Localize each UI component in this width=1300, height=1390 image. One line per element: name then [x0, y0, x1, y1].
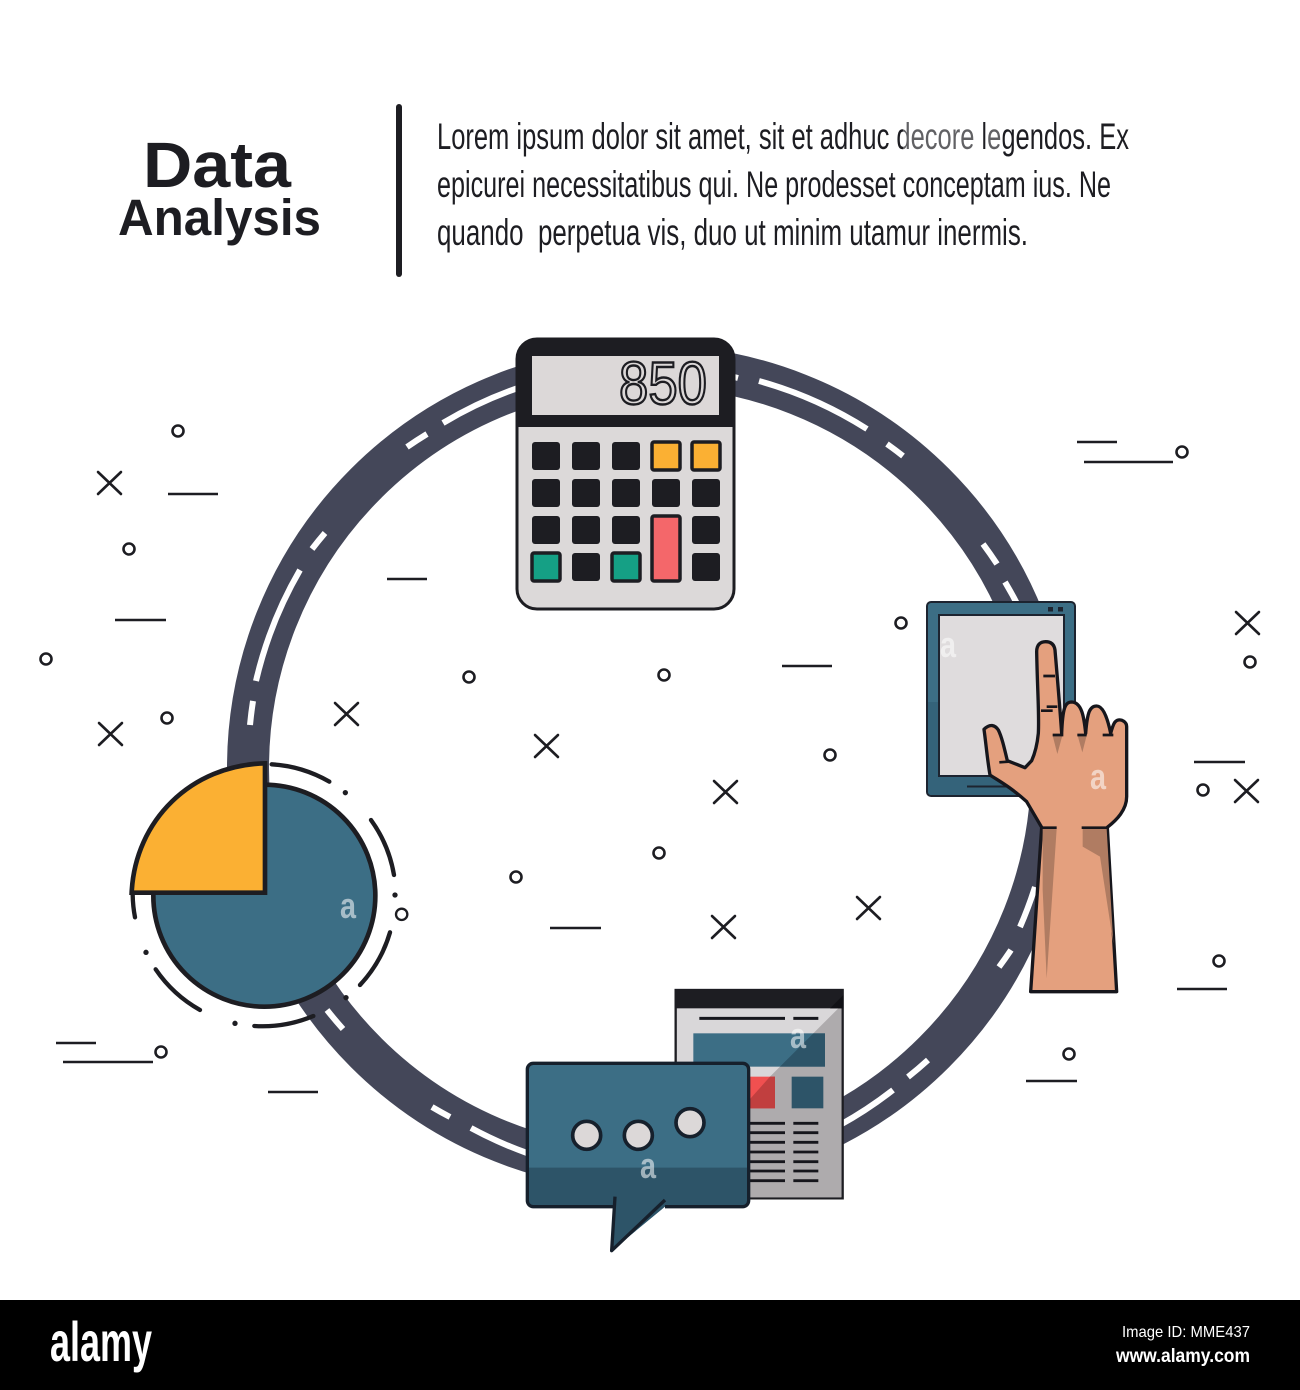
header: title: [118, 129, 321, 246]
header: title: Analysis: [118, 189, 321, 246]
decorative crosses: [98, 472, 1259, 938]
footer url: www.alamy.com: [1115, 1346, 1250, 1367]
footer bar: [0, 1300, 1300, 1390]
icon: hand: [984, 642, 1127, 992]
watermark letters: a: [940, 624, 957, 665]
decorative dashes: [56, 442, 1245, 1092]
footer logo: alamy: [50, 1310, 152, 1373]
header: body text: quando perpetua vis, duo ut minim utamur inermis.: [437, 212, 1028, 253]
header: body text: [437, 116, 1129, 253]
watermark letters: a: [340, 885, 357, 926]
watermark letters: [340, 624, 1107, 1186]
road ring: [248, 366, 1052, 1170]
calculator keys: [532, 442, 720, 581]
icon: speech bubble: [527, 1063, 749, 1251]
icon: document page: [675, 989, 843, 1198]
decorative small circles: [40, 426, 1256, 1060]
header: vertical divider: [396, 104, 402, 277]
watermark letters: a: [1090, 756, 1107, 797]
icon: pie chart: [132, 763, 407, 1026]
icon: tablet: [927, 602, 1075, 796]
pie chart orbit arcs and dots: [133, 764, 407, 1026]
watermark letters: a: [790, 1015, 807, 1056]
header: title: Data: [143, 129, 291, 201]
watermark letters: a: [640, 1145, 657, 1186]
icon: calculator: [516, 338, 734, 609]
footer image id: Image ID: MME437: [1122, 1324, 1250, 1341]
calculator display number: 850: [619, 350, 707, 417]
